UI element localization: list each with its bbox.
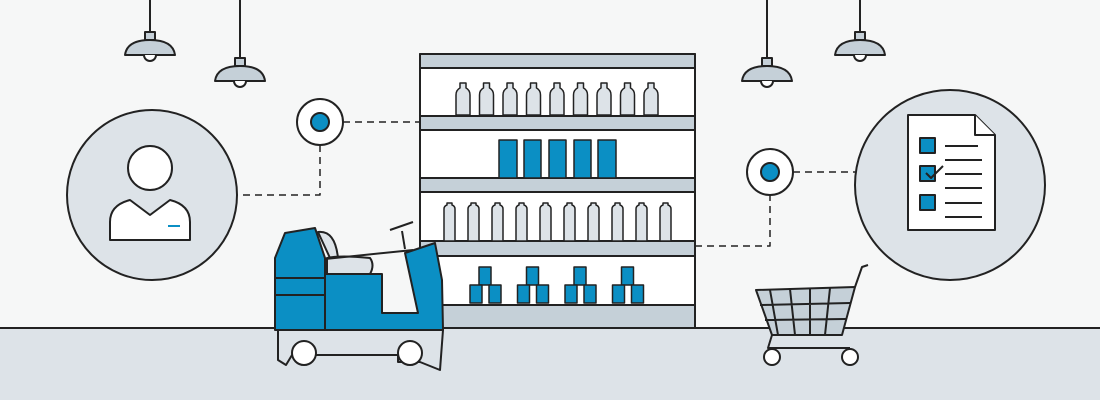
lamp: left 1 — [125, 0, 175, 61]
node: left — [297, 99, 343, 145]
node: right — [747, 149, 793, 195]
bottles row 3 — [444, 203, 671, 241]
bottles row 1 — [456, 83, 658, 115]
dashed connectors — [237, 122, 855, 246]
icon: checklist document — [908, 115, 995, 230]
shopping cart — [756, 265, 868, 365]
shelf unit — [420, 54, 695, 328]
lamp: right 1 — [742, 0, 792, 87]
cube stacks — [470, 267, 644, 303]
icon: person — [110, 146, 190, 240]
lamp: right 2 — [835, 0, 885, 61]
blue boxes — [499, 140, 616, 178]
lamp: left 2 — [215, 0, 265, 87]
floor scrubber — [275, 222, 443, 370]
panel: checklist circle — [855, 90, 1045, 280]
panel: person circle — [67, 110, 237, 280]
